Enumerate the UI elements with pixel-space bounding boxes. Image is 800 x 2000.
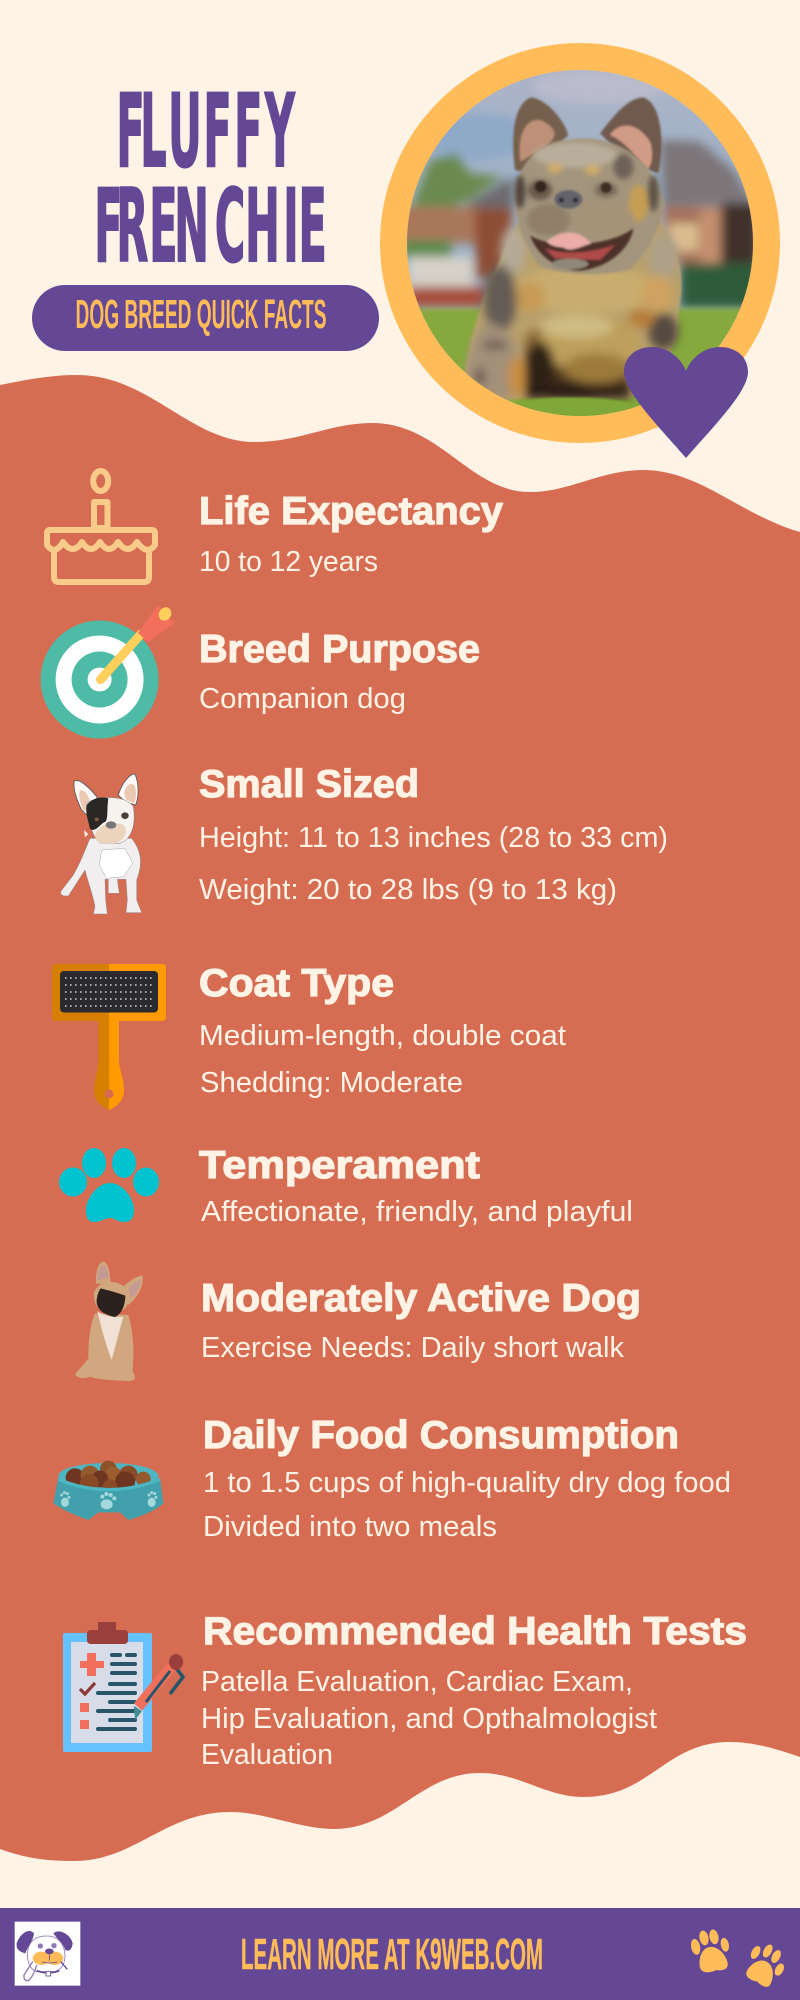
icon: fawn sitting french bulldog [75, 1262, 143, 1381]
title: FLUFFY [116, 73, 295, 191]
text: breed purpose value: Companion dog [199, 683, 406, 715]
heart [624, 347, 748, 458]
text: meals: Divided into two meals [203, 1511, 497, 1543]
heading: life expectancy: Life Expectancy [199, 490, 503, 533]
text: cups per day: 1 to 1.5 cups of high-quality dry dog food [203, 1467, 731, 1499]
icon: birthday cake [47, 471, 155, 582]
text: height: Height: 11 to 13 inches (28 to 33 cm) [199, 822, 668, 854]
dog body [465, 210, 682, 400]
icon: clipboard and pen [63, 1622, 183, 1752]
heading: temperament: Temperament [199, 1144, 480, 1187]
wavy terracotta panel [0, 375, 800, 1861]
heading: moderately active: Moderately Active Dog [201, 1277, 641, 1320]
title: FRENCHIE [94, 168, 327, 286]
text: health tests list: Hip Evaluation, and Opthalmologist [201, 1703, 657, 1735]
icon: target with arrow [41, 605, 176, 738]
text: life expectancy value: 10 to 12 years [199, 546, 378, 578]
subtitle pill [32, 285, 379, 351]
subtitle pill: DOG BREED QUICK FACTS [76, 291, 326, 337]
heading: coat type: Coat Type [199, 962, 394, 1005]
footer bar [0, 1908, 800, 2000]
heading: daily food: Daily Food Consumption [203, 1414, 679, 1457]
dog ears [513, 97, 661, 173]
text: weight: Weight: 20 to 28 lbs (9 to 13 kg) [199, 874, 617, 906]
title [94, 73, 327, 286]
text: coat length: Medium-length, double coat [199, 1020, 566, 1052]
icon: teal paw [59, 1148, 159, 1222]
icon: pied french bulldog [61, 774, 142, 914]
text: health tests list: Patella Evaluation, Cardiac Exam, [201, 1666, 633, 1698]
heading: small sized: Small Sized [199, 763, 419, 806]
heading: breed purpose: Breed Purpose [199, 628, 480, 671]
heading: health tests: Recommended Health Tests [203, 1610, 747, 1653]
dog head [515, 138, 665, 274]
photo: fluffy frenchie in orange ring [380, 43, 780, 443]
icon: food bowl [53, 1461, 163, 1520]
text: health tests list [201, 1666, 657, 1771]
text: exercise needs: Exercise Needs: Daily short walk [201, 1332, 624, 1364]
text: temperament value: Affectionate, friendly, and playful [201, 1196, 633, 1228]
icon: k9web logo [15, 1922, 80, 1986]
icon: slicker brush [52, 964, 166, 1110]
text: health tests list: Evaluation [201, 1739, 333, 1771]
foreground grass [512, 396, 638, 416]
text: shedding: Shedding: Moderate [200, 1067, 463, 1099]
icon: footer paw prints [688, 1926, 791, 1991]
